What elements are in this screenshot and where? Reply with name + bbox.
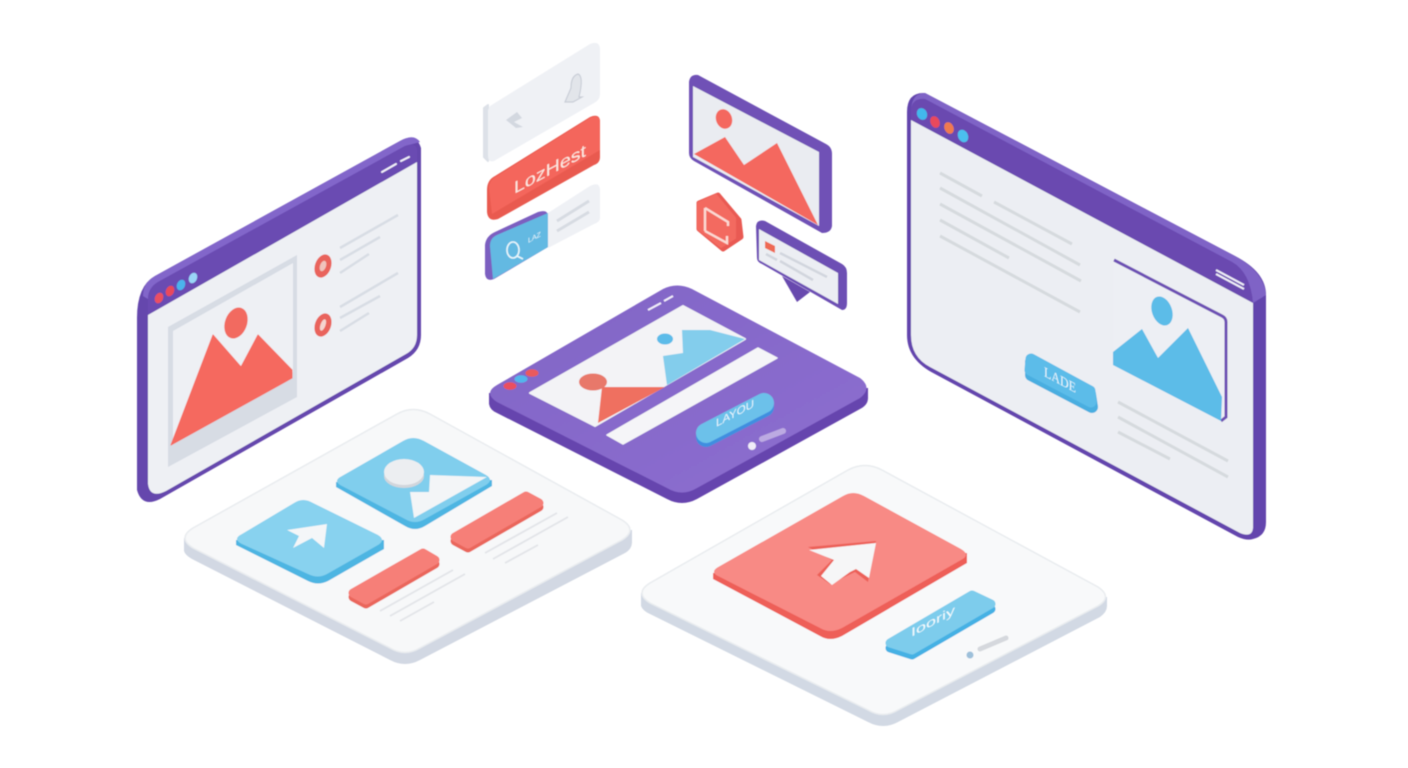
bubble face (759, 229, 838, 304)
red marker (765, 241, 775, 253)
button: login: Iooriy (911, 602, 956, 640)
panel: lower right layout card (641, 466, 1107, 726)
body text lines (940, 173, 1081, 312)
button: LADE: LADE (1044, 365, 1076, 397)
red sun (713, 107, 735, 131)
blue mountain (1113, 328, 1222, 421)
circle knob (384, 464, 424, 488)
bubble frame (756, 221, 847, 310)
tile side (336, 480, 492, 529)
image background (173, 263, 293, 442)
panel: left browser window (137, 137, 421, 502)
window dots (915, 106, 970, 144)
white input bar (607, 348, 777, 444)
bubble text lines (766, 253, 827, 280)
panel: toolbar card (484, 43, 600, 161)
search text lines (557, 201, 589, 231)
blue mountain (663, 330, 745, 385)
card side (484, 105, 488, 161)
red mountain (598, 387, 665, 423)
icon: back arrow (506, 112, 523, 128)
red sun (579, 374, 607, 390)
tile side (236, 540, 384, 584)
icon: arrow (287, 524, 327, 548)
bubble tail (782, 276, 810, 302)
tile face (714, 493, 966, 631)
list badge one (311, 252, 335, 280)
button: login (890, 595, 991, 655)
window controls (648, 296, 673, 310)
panel: speech bubble (756, 221, 847, 310)
list text lines (340, 215, 398, 331)
list badge two (311, 311, 335, 339)
tile face (237, 500, 382, 576)
blue sun (1147, 293, 1177, 329)
icon: bell (565, 74, 582, 102)
window frame (137, 138, 421, 502)
title bar (911, 99, 1253, 303)
button: LAYOUT (706, 397, 764, 437)
red bar top (455, 496, 539, 548)
button: LAYOUT: LAYOU (716, 397, 754, 430)
button: red label (487, 116, 600, 220)
card face (488, 43, 600, 161)
window screen (911, 120, 1253, 535)
button: red label: LozHest (514, 141, 586, 198)
red bar bottom (353, 553, 435, 604)
panel: search bar: LAZ (528, 229, 541, 245)
caption text lines (1118, 402, 1228, 477)
arrow tile (236, 500, 384, 584)
panel: central purple card (489, 286, 868, 503)
pagination bar (762, 431, 783, 439)
tile face (337, 438, 490, 522)
pagination dot (748, 442, 756, 450)
icon: red hexagon badge (698, 195, 741, 249)
window dots (504, 369, 538, 390)
red mountain (694, 137, 818, 225)
card face (490, 286, 866, 492)
frame (689, 75, 832, 233)
title bar (148, 145, 417, 315)
image tile (336, 438, 492, 529)
window screen (148, 162, 417, 494)
card side (641, 593, 1107, 726)
window controls (382, 157, 409, 172)
blue sun (657, 334, 673, 344)
window frame (907, 93, 1266, 540)
card side (489, 388, 868, 503)
red sun (220, 304, 252, 342)
image panel (530, 306, 745, 426)
picture background (693, 86, 819, 226)
panel: lower left layout card (184, 410, 632, 664)
card face (642, 466, 1106, 714)
panel: framed image (689, 75, 832, 233)
pagination dot (966, 652, 974, 658)
window controls (1216, 270, 1244, 289)
window dots (153, 271, 199, 305)
white mountain (410, 475, 487, 518)
window top highlight (143, 137, 420, 299)
panel: search bar (485, 184, 600, 280)
text lines bottom (380, 570, 465, 621)
image card (1113, 260, 1225, 421)
image card edge (1114, 260, 1226, 421)
tile side (713, 553, 967, 639)
red arrow tile (713, 493, 967, 639)
card side (184, 530, 632, 664)
button: LADE (1030, 359, 1092, 407)
image frame (168, 255, 297, 467)
pagination bar (980, 638, 1006, 649)
text lines top (485, 513, 568, 563)
icon: arrow (808, 541, 876, 585)
search button (485, 211, 548, 280)
search field (548, 184, 600, 248)
panel: right browser window (907, 93, 1266, 540)
window top highlight (911, 93, 1266, 303)
icon: magnifier (507, 242, 523, 259)
red mountain (171, 335, 292, 445)
card face (185, 410, 630, 652)
